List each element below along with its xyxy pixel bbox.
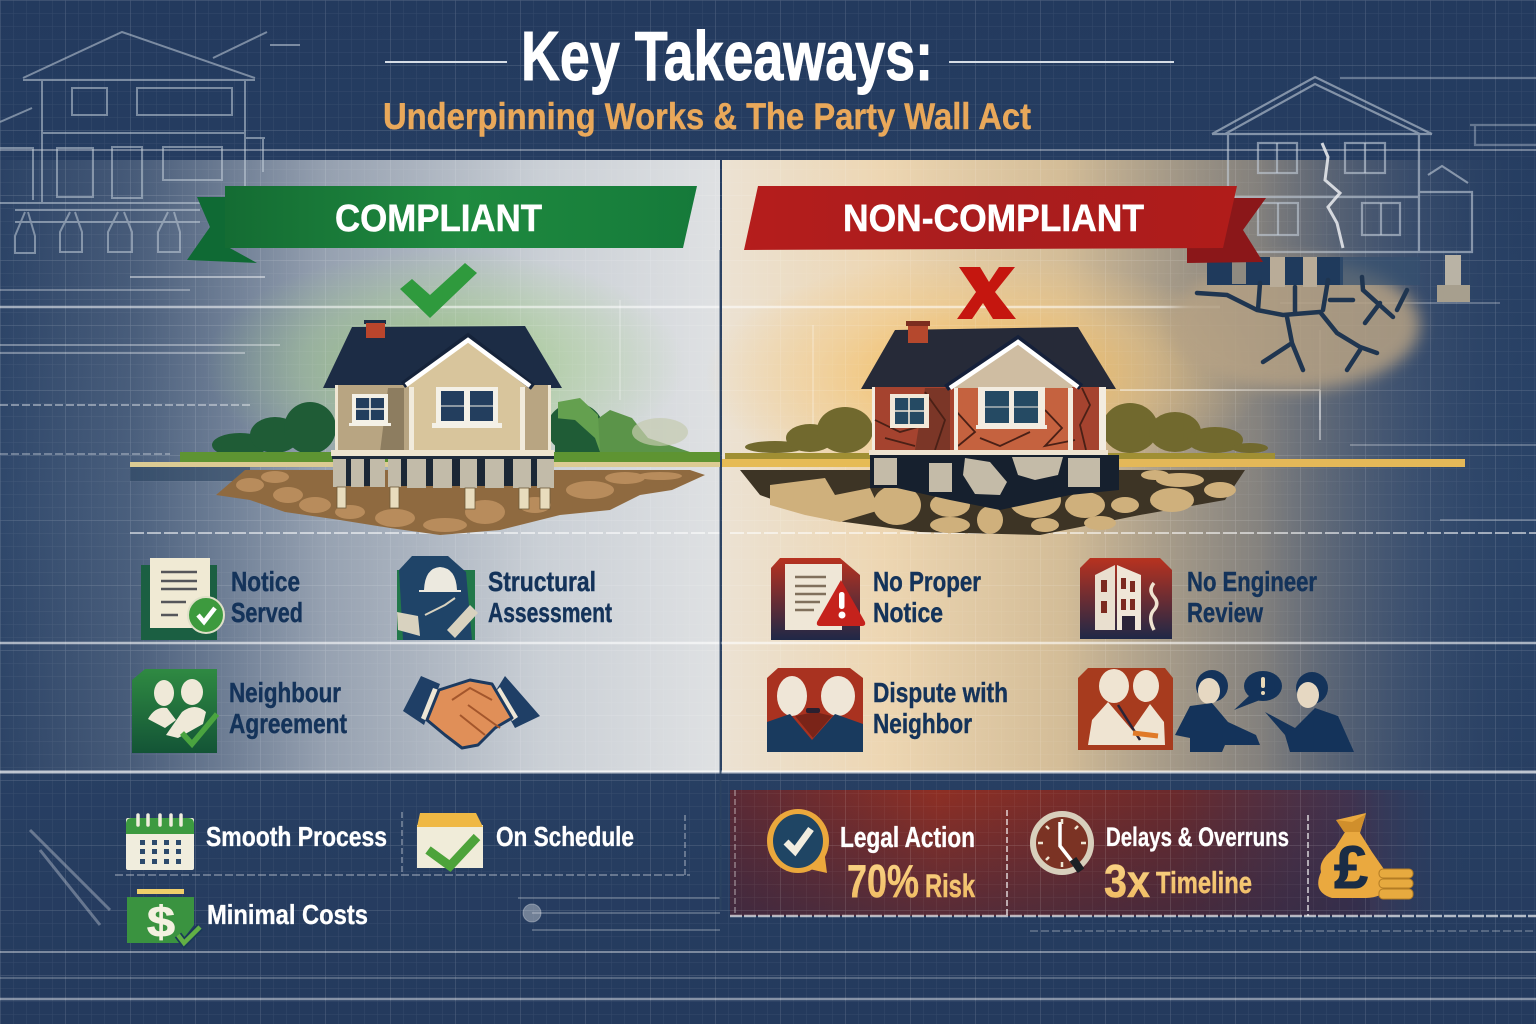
stat: 3x timeline: Timeline: [1156, 865, 1252, 900]
label: Minimal Costs: [207, 899, 368, 930]
item: notice served: [141, 558, 303, 640]
label: Legal Action: [840, 822, 975, 854]
icon: speech badge check: [767, 809, 829, 873]
banner: non-compliant: NON-COMPLIANT: [843, 198, 1144, 240]
label: Dispute with: [873, 677, 1008, 708]
icon: money bag pound: [1318, 813, 1413, 901]
icon: clock: [1033, 814, 1091, 873]
roof: [323, 326, 562, 388]
house: compliant: [130, 320, 720, 535]
icon: cracked building: [1080, 558, 1172, 639]
icon: dispute scene: [1078, 668, 1354, 752]
label: Review: [1187, 597, 1263, 628]
label: No Proper: [873, 566, 981, 597]
title rule right: [949, 61, 1174, 63]
large window: [978, 387, 1045, 427]
banner: non-compliant: [744, 186, 1266, 263]
cracked ground: top right: [1170, 255, 1470, 390]
small window: [890, 394, 929, 428]
icon: red X: [957, 267, 1016, 319]
ground: [180, 452, 720, 462]
item: on schedule: [417, 813, 634, 868]
icon: document with check: [141, 558, 224, 640]
panel: non-compliant background: [722, 160, 1536, 772]
icon: two people check: [132, 669, 217, 753]
panel: red results band: [730, 790, 1470, 916]
item: dispute with neighbor: [767, 668, 1008, 752]
glow: green behind house: [205, 250, 685, 480]
title rule left: [385, 61, 507, 63]
label: Served: [231, 597, 303, 628]
item: legal action: [767, 809, 975, 907]
banner: compliant: [187, 186, 697, 263]
gable trim: [403, 337, 533, 387]
house: non-compliant: [722, 321, 1465, 535]
label: Structural: [488, 566, 596, 597]
small window: [352, 394, 388, 424]
subtitle: Underpinning Works & The Party Wall Act: [383, 96, 1031, 137]
stat: 70% risk: Risk: [925, 868, 975, 904]
icon: dollar note: [127, 889, 200, 947]
icon: handshake: [403, 676, 540, 748]
icon: two faces: [767, 668, 863, 752]
chimney: [906, 321, 930, 326]
icon: money bag pound: £: [1334, 834, 1368, 901]
title: [383, 17, 1174, 137]
sill: [869, 450, 1108, 455]
item: smooth process: [126, 815, 387, 870]
item: minimal costs: [127, 889, 368, 947]
label: Notice: [873, 597, 943, 628]
label: Agreement: [229, 708, 347, 739]
item: no engineer review: [1080, 558, 1317, 639]
brick cracks: [875, 388, 1090, 450]
icon: calendar check: [417, 813, 483, 868]
label: Smooth Process: [206, 821, 387, 852]
label: Neighbor: [873, 708, 972, 739]
foundation: [332, 456, 554, 459]
soil: [216, 470, 705, 535]
centre divider: [720, 250, 722, 910]
item: no proper notice: [771, 558, 981, 640]
ground: [725, 453, 872, 459]
glow: orange behind house: [705, 255, 1265, 495]
panel: compliant background: [0, 160, 720, 772]
sill: [331, 450, 554, 456]
heading: Key Takeaways: Key Takeaways:: [521, 17, 933, 95]
icon: hard hat and tools: [397, 556, 478, 640]
gable trim: [946, 339, 1081, 388]
broken foundation: [870, 455, 1119, 510]
label: No Engineer: [1187, 566, 1317, 597]
stat: 70% risk: 70%: [847, 855, 919, 907]
chimney: [364, 320, 386, 324]
bushes: [745, 403, 1268, 453]
soil: [740, 470, 1245, 535]
walls: [872, 387, 1106, 450]
stat: 3x timeline: 3x: [1104, 855, 1150, 907]
label: Notice: [231, 566, 300, 597]
label: Neighbour: [229, 677, 341, 708]
walls: [335, 385, 551, 452]
blueprint house: top right: [1212, 77, 1536, 252]
blueprint house: top left: [0, 32, 300, 253]
icon: green check: [400, 263, 477, 318]
label: Assessment: [488, 597, 612, 628]
icon: document warning: [771, 558, 865, 640]
banner: compliant: COMPLIANT: [335, 198, 542, 240]
label: Delays & Overruns: [1106, 822, 1289, 852]
item: neighbour agreement: [132, 669, 347, 753]
roof: [861, 327, 1116, 389]
label: On Schedule: [496, 821, 634, 852]
item: delays and overruns: [1033, 814, 1289, 907]
large window: [436, 387, 498, 425]
icon: dollar note: $: [147, 898, 175, 947]
icon: calendar: [126, 815, 194, 870]
trees: [212, 402, 622, 457]
item: structural assessment: [397, 556, 612, 640]
